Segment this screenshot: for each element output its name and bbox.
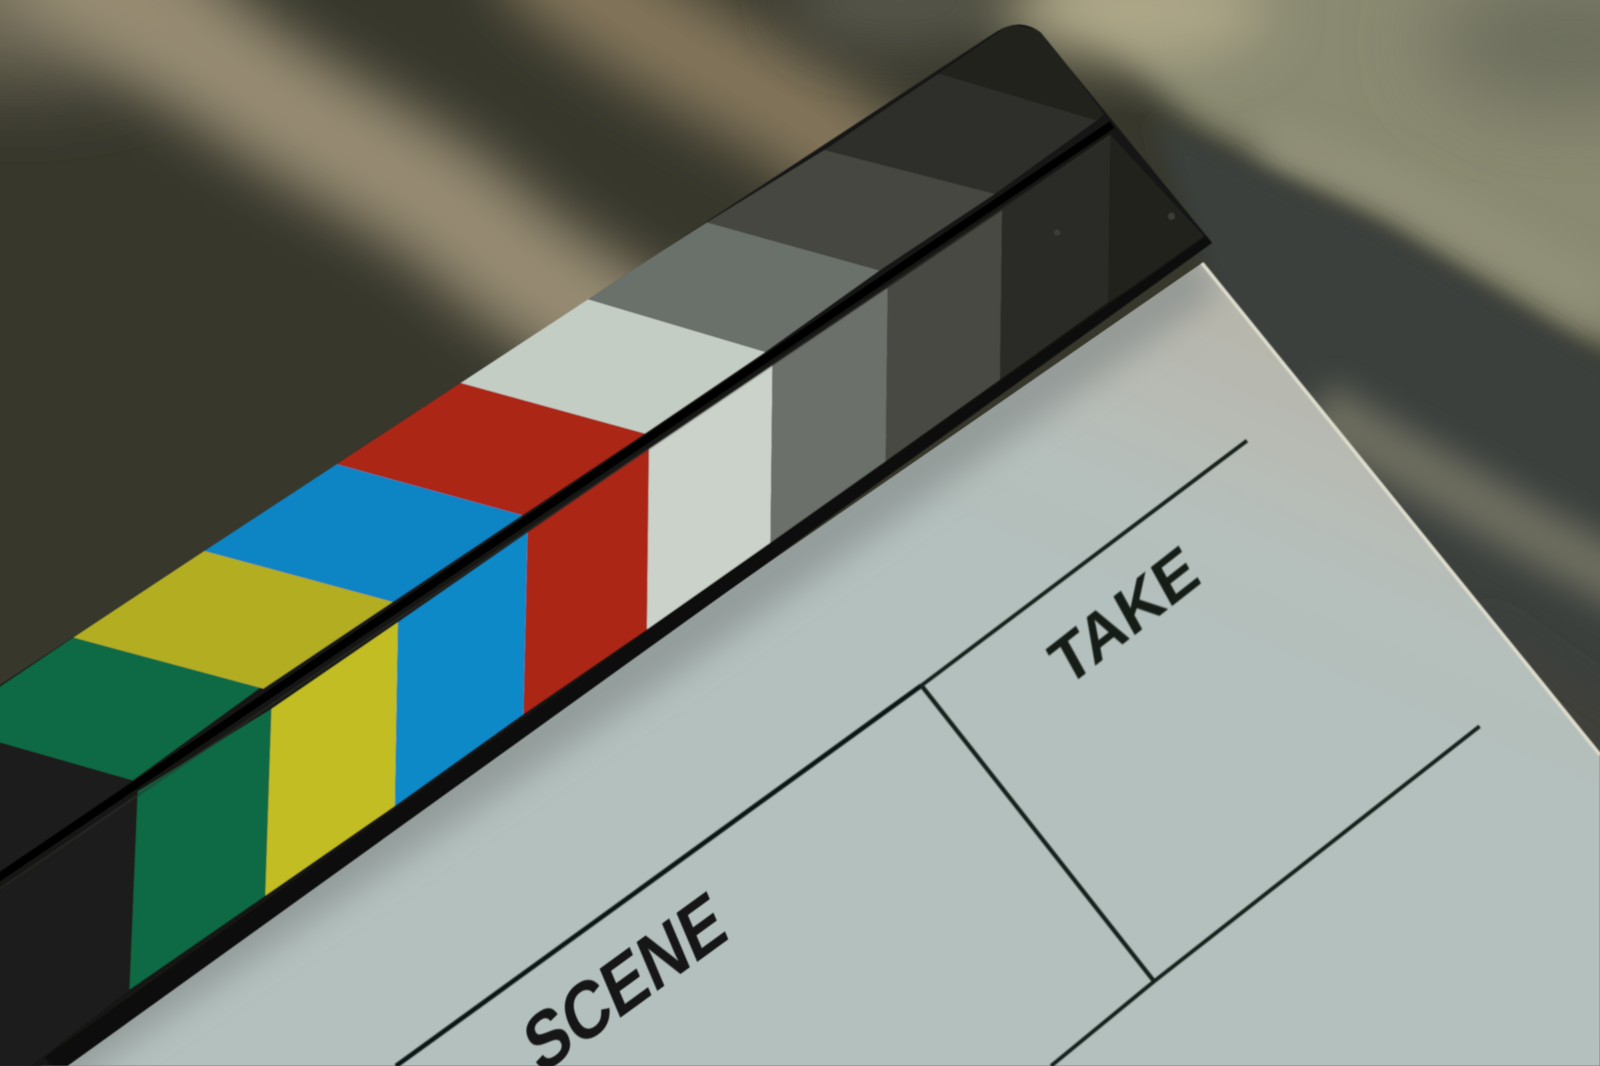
stick shadow on the board	[41, 267, 1204, 1066]
label: TAKE: TAKE	[1039, 532, 1210, 701]
clapper sticks	[0, 24, 1212, 1066]
left light bands	[0, 0, 1010, 398]
slate ruled lines	[396, 441, 1480, 1066]
hinge gap between sticks	[0, 124, 1112, 883]
right shadow band	[1153, 120, 1600, 1066]
white slate board	[41, 263, 1600, 1066]
stick screws	[1054, 213, 1175, 236]
upper stick stripes	[0, 24, 1104, 879]
lower stick bottom edge	[51, 245, 1212, 1066]
lower stick stripes	[128, 136, 1205, 990]
right light area	[1000, 0, 1600, 367]
lower right glow band	[1316, 408, 1600, 597]
stick base	[0, 24, 1212, 1066]
